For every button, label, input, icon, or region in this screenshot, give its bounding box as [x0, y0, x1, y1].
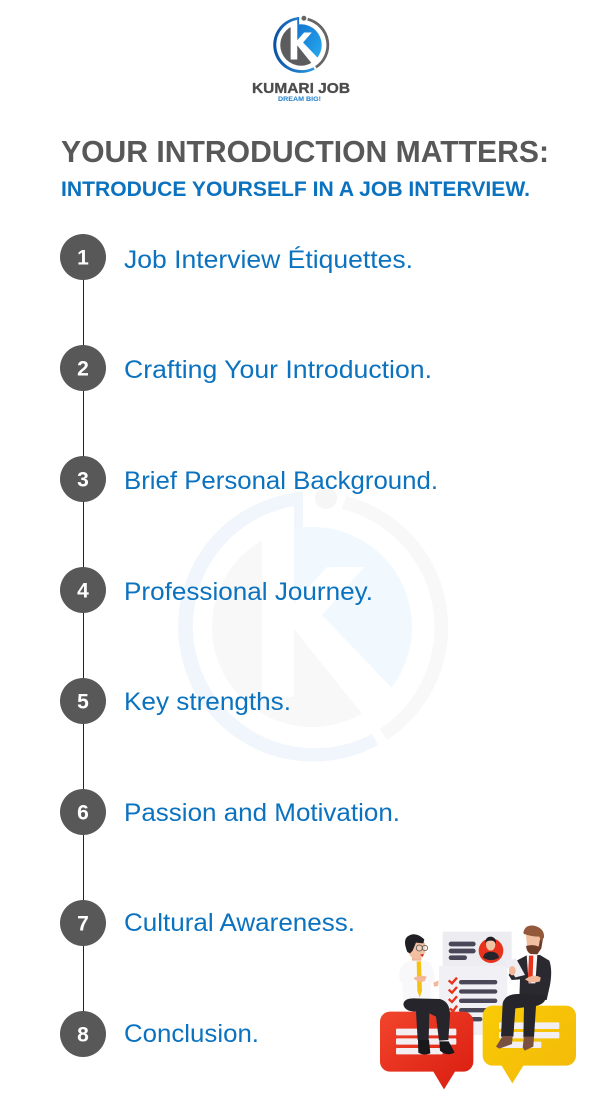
step 2	[60, 345, 432, 391]
checklist sheet	[439, 966, 507, 1035]
resume back sheet	[443, 932, 512, 968]
logo wordmark: KUMARI JOB	[252, 81, 350, 97]
step 6: Passion and Motivation.	[124, 799, 400, 827]
step 3: 3	[77, 468, 89, 492]
step 5: 5	[77, 690, 89, 714]
bearded man	[496, 925, 551, 1051]
step 4: Professional Journey.	[124, 578, 373, 606]
yellow speech bubble	[483, 1006, 576, 1083]
timeline connector	[82, 257, 84, 1034]
step 6: 6	[77, 802, 89, 824]
step 8	[60, 1011, 259, 1057]
logo	[252, 16, 350, 103]
step 4	[60, 567, 373, 613]
step 5	[60, 678, 291, 724]
step 7: Cultural Awareness.	[124, 909, 355, 937]
step 1: Job Interview Étiquettes.	[124, 245, 413, 274]
step 7: 7	[77, 912, 89, 936]
step 8: 8	[77, 1024, 89, 1046]
watermark logo	[178, 487, 412, 762]
step 7	[60, 900, 355, 946]
step 3: Brief Personal Background.	[124, 467, 438, 495]
step 2: 2	[77, 358, 89, 380]
subtitle: INTRODUCE YOURSELF IN A JOB INTERVIEW.	[61, 177, 530, 201]
step 6	[60, 789, 400, 835]
title: YOUR INTRODUCTION MATTERS:	[61, 135, 549, 169]
step 4: 4	[77, 580, 89, 602]
step 2: Crafting Your Introduction.	[124, 356, 432, 384]
step 5: Key strengths.	[124, 688, 291, 716]
step 3	[60, 456, 438, 502]
red speech bubble	[380, 1012, 473, 1089]
logo emblem	[273, 16, 329, 73]
man with glasses	[399, 934, 455, 1055]
illustration: two people on speech bubbles	[380, 925, 576, 1089]
step 1	[60, 234, 413, 280]
logo tagline: DREAM BIG!	[278, 97, 321, 103]
step 8: Conclusion.	[124, 1020, 259, 1048]
step 1: 1	[77, 246, 89, 270]
